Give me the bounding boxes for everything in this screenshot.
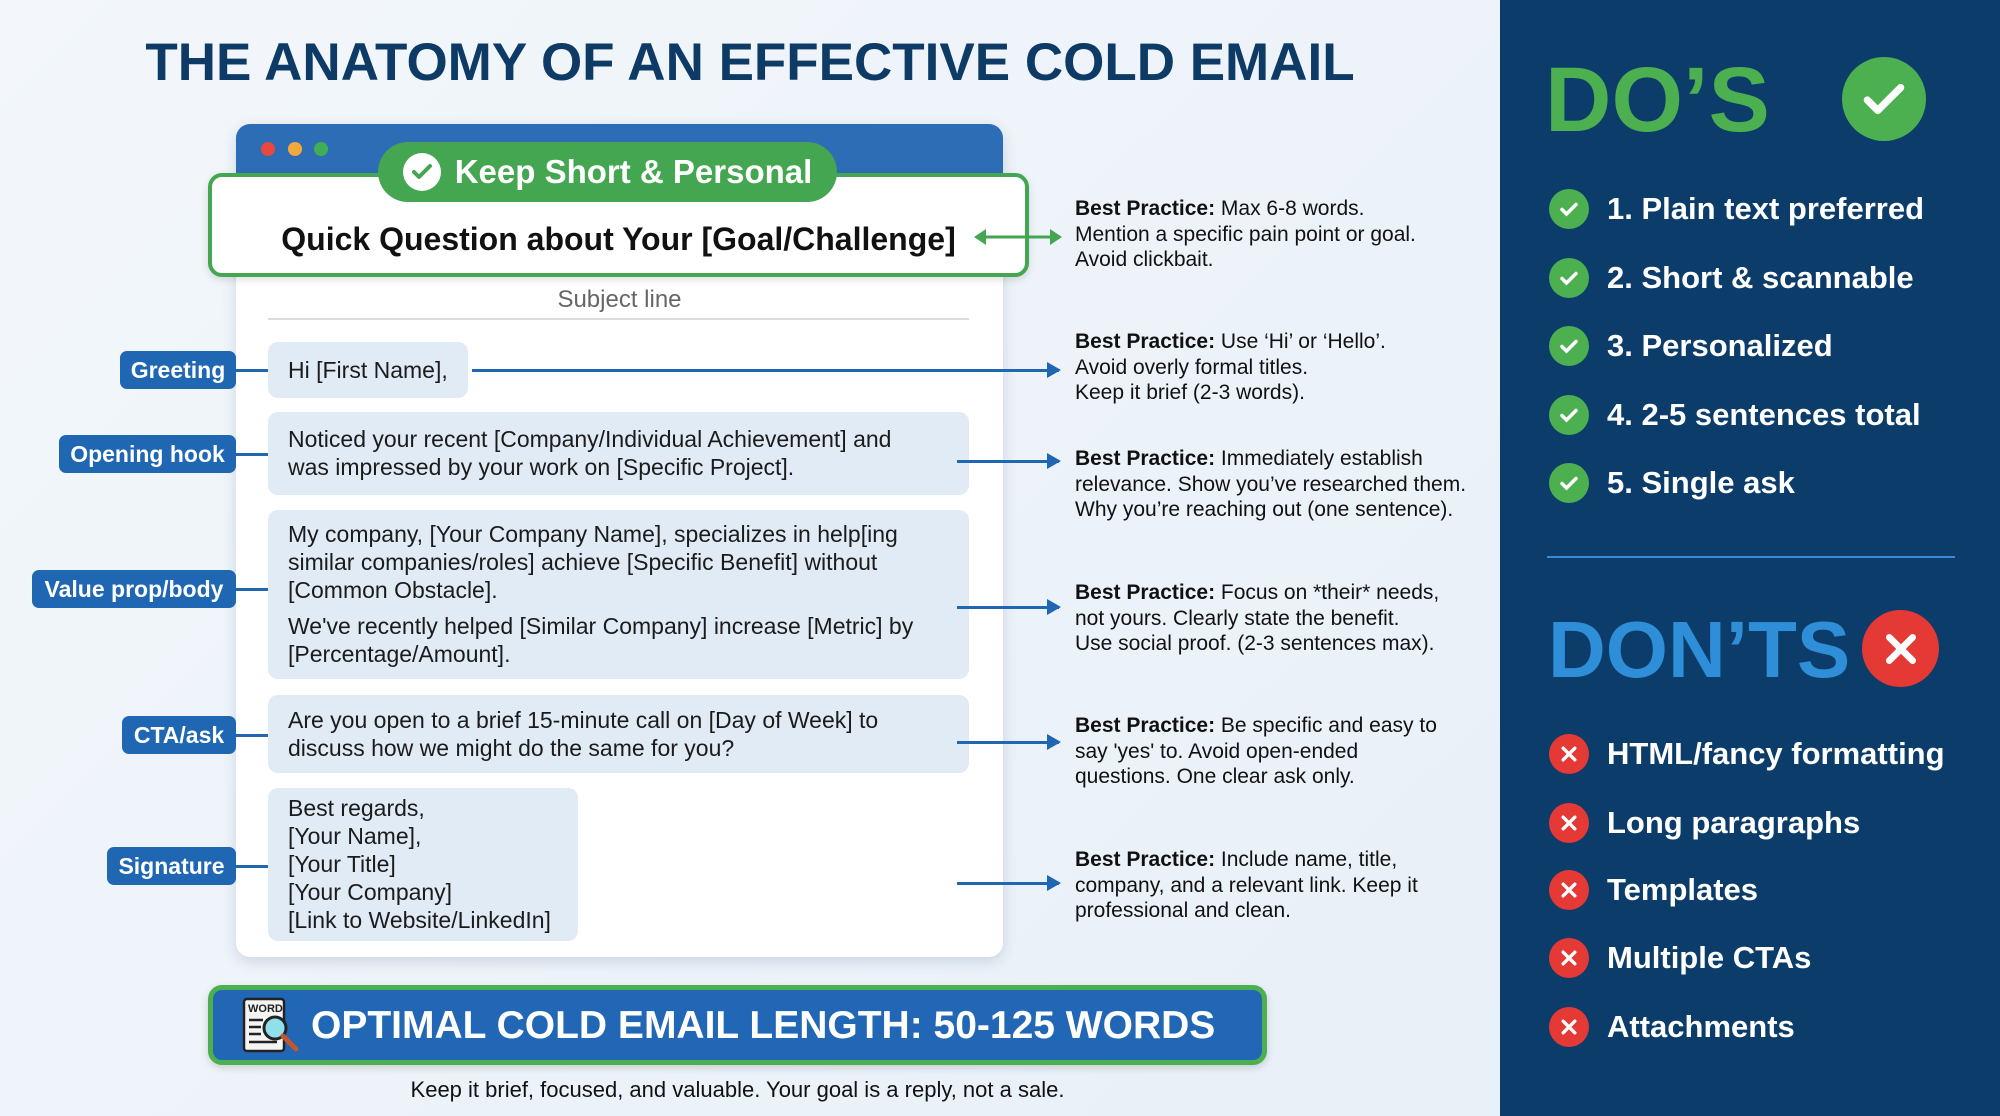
icon: big x [1862, 610, 1939, 687]
list: donts [1549, 734, 1945, 1047]
label: signature [107, 847, 236, 885]
opening hook box: was impressed by your work on [Specific Project]. [288, 454, 794, 480]
do item 5: 5. Single ask [1607, 465, 1795, 500]
arrow: hook [957, 460, 1059, 463]
best practice: greeting: Best Practice: Use ‘Hi’ or ‘Hello’. [1075, 330, 1386, 353]
window title bar [236, 124, 1003, 174]
best practice: signature [1075, 848, 1418, 922]
signature box: Best regards, [288, 795, 425, 821]
do item 4: 4. 2-5 sentences total [1607, 397, 1921, 432]
dont item 4 [1549, 938, 1811, 978]
do item 5 [1549, 463, 1795, 503]
dont item 5: Attachments [1607, 1009, 1795, 1044]
badge: keep short & personal: Keep Short & Personal [455, 153, 812, 190]
icon: word doc with magnifier [242, 998, 298, 1052]
label: greeting: Greeting [131, 357, 225, 383]
banner text: OPTIMAL COLD EMAIL LENGTH: 50-125 WORDS [311, 1004, 1215, 1047]
best practice: subject [1075, 197, 1416, 271]
label: cta: CTA/ask [134, 722, 224, 748]
best practice: subject: Avoid clickbait. [1075, 248, 1214, 271]
best practice: subject: Mention a specific pain point or goal. [1075, 222, 1416, 246]
best practice: greeting [1075, 330, 1386, 404]
label: opening hook: Opening hook [70, 441, 225, 467]
best practice: signature: company, and a relevant link. Keep it [1075, 874, 1418, 896]
heading: dos: DO’S [1545, 49, 1770, 151]
panel: dos and donts [1500, 0, 2000, 1116]
title: THE ANATOMY OF AN EFFECTIVE COLD EMAIL [145, 33, 1355, 92]
best practice: subject: Best Practice: Max 6-8 words. [1075, 197, 1364, 220]
arrow: greeting [472, 369, 1059, 372]
label: value prop [32, 570, 236, 608]
label: opening hook [59, 435, 236, 473]
best practice: value: not yours. Clearly state the benefit. [1075, 606, 1400, 630]
best practice: cta: say 'yes' to. Avoid open-ended [1075, 740, 1358, 762]
arrow: subject double arrow [974, 229, 1062, 245]
dont item 1: HTML/fancy formatting [1607, 736, 1945, 771]
arrow: value [957, 606, 1059, 609]
badge: keep short & personal [378, 142, 837, 202]
best practice: signature: professional and clean. [1075, 899, 1291, 922]
do item 1: 1. Plain text preferred [1607, 191, 1924, 226]
dont item 4: Multiple CTAs [1607, 940, 1811, 975]
greeting box [268, 342, 468, 398]
panel: email window [236, 124, 1003, 957]
value prop box: My company, [Your Company Name], specializes in help[ing similar companies/roles] achieve [Specific Benefit] without [Common Obstacle]. [288, 521, 898, 603]
best practice: value: Use social proof. (2-3 sentences max). [1075, 632, 1434, 655]
icon: word doc with magnifier: WORD [248, 1003, 283, 1015]
do item 2: 2. Short & scannable [1607, 260, 1914, 295]
subject line box [208, 173, 1029, 277]
caption: Keep it brief, focused, and valuable. Your goal is a reply, not a sale. [411, 1077, 1064, 1102]
best practice: greeting: Keep it brief (2-3 words). [1075, 381, 1305, 404]
cta box: Are you open to a brief 15-minute call on [Day of Week] to discuss how we might do the same for you? [288, 707, 878, 761]
arrow: cta [957, 741, 1059, 744]
do item 3 [1549, 326, 1833, 366]
dont item 3 [1549, 870, 1758, 910]
list: dos [1549, 189, 1924, 503]
signature box: [Link to Website/LinkedIn] [288, 907, 551, 933]
icon: check [403, 153, 441, 191]
signature box [268, 788, 578, 941]
opening hook box [268, 412, 969, 495]
best practice: hook: Best Practice: Immediately establish relevance. Show you’ve researched them. Why you’re reaching out (one sentence). [1075, 447, 1466, 521]
dont item 3: Templates [1607, 872, 1758, 907]
value prop box: We've recently helped [Similar Company] increase [Metric] by [Percentage/Amount]. [288, 613, 913, 667]
signature box: [Your Company] [288, 879, 452, 905]
best practice: signature: Best Practice: Include name, title, [1075, 848, 1397, 871]
signature box: [Your Name], [288, 823, 421, 849]
best practice: cta: Best Practice: Be specific and easy to [1075, 714, 1437, 737]
label: cta [122, 716, 236, 754]
best practice: cta: questions. One clear ask only. [1075, 765, 1355, 788]
subject line caption: Subject line [557, 286, 682, 313]
best practice: value [1075, 581, 1439, 655]
label: greeting [120, 351, 236, 389]
best practice: value: Best Practice: Focus on *their* needs, [1075, 581, 1439, 604]
dont item 2: Long paragraphs [1607, 805, 1860, 840]
signature box: [Your Title] [288, 851, 396, 877]
label: signature: Signature [118, 853, 225, 879]
arrow: signature [957, 882, 1059, 885]
banner: optimal length [208, 985, 1267, 1065]
subject text: Quick Question about Your [Goal/Challenge] [281, 221, 956, 257]
best practice: greeting: Avoid overly formal titles. [1075, 356, 1308, 378]
greeting box: Hi [First Name], [288, 357, 448, 383]
value prop box [268, 510, 969, 679]
icon: big check [1842, 57, 1926, 141]
cta box [268, 695, 969, 773]
opening hook box: Noticed your recent [Company/Individual Achievement] and [288, 426, 891, 452]
best practice: cta [1075, 714, 1437, 788]
dont item 5 [1549, 1007, 1795, 1047]
do item 3: 3. Personalized [1607, 328, 1833, 363]
heading: donts: DON’TS [1548, 605, 1850, 694]
label: value prop: Value prop/body [45, 576, 223, 602]
